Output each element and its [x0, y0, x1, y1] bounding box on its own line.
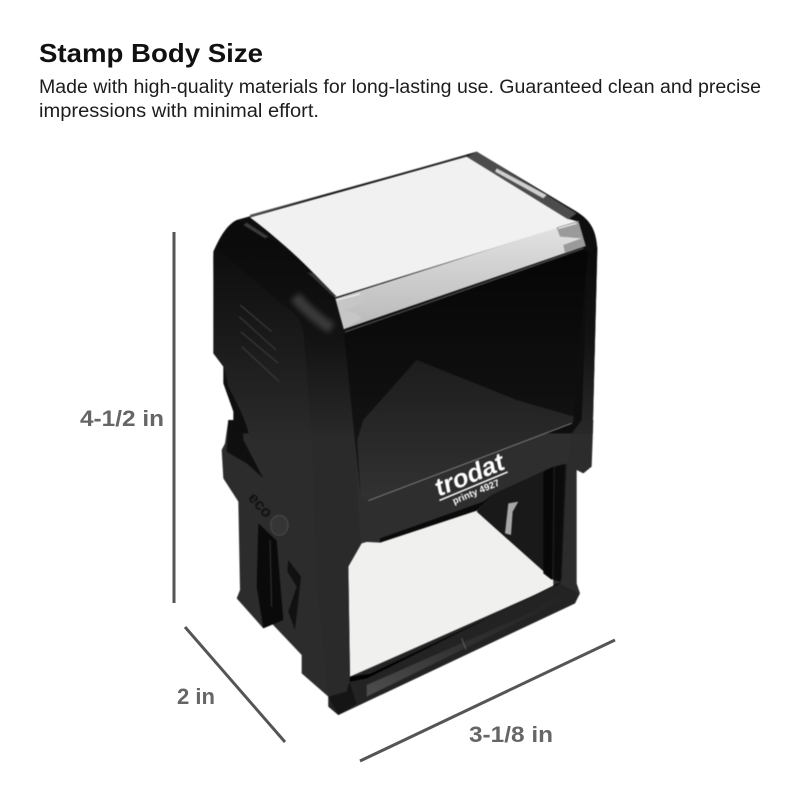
stamp lower body — [222, 420, 593, 715]
top rear trim — [467, 152, 577, 219]
model text: printy 4927 — [451, 478, 501, 507]
right edge — [572, 247, 597, 433]
description text: impressions with minimal effort. — [39, 101, 319, 122]
side panel lower — [257, 420, 312, 513]
eco mark: eco — [244, 490, 276, 522]
window interior mechanism — [477, 463, 567, 580]
dimension line: depth — [185, 627, 285, 742]
mark on base — [462, 638, 466, 649]
dimension label: depth: 2 in — [177, 684, 215, 709]
front lower band — [353, 420, 573, 543]
window lower edge — [350, 583, 562, 682]
stamp upper body — [213, 152, 597, 501]
dimension label: height: 4-1/2 in — [80, 406, 164, 431]
side vents — [239, 305, 279, 382]
left corner column — [312, 420, 360, 697]
side panel — [213, 249, 312, 440]
description text: Made with high-quality materials for long-lasting use. Guaranteed clean and precise — [39, 77, 761, 98]
description text — [39, 77, 761, 122]
side clip — [287, 560, 301, 630]
white top label — [250, 157, 578, 297]
stamp window — [348, 510, 553, 677]
gloss reflection — [357, 360, 574, 500]
recycling mark — [271, 515, 288, 535]
left shoulder — [217, 220, 357, 440]
brand logo: trodat — [430, 447, 510, 502]
panel seam — [368, 423, 572, 501]
base foot — [328, 583, 579, 715]
title: Stamp Body Size — [39, 38, 263, 68]
side slot — [257, 523, 283, 628]
clear bar — [333, 221, 586, 329]
dimension line: height — [172, 232, 176, 603]
dimension line: width — [360, 640, 615, 761]
front glossy panel — [344, 250, 588, 500]
logo underline — [439, 471, 508, 501]
dimension label: width: 3-1/8 in — [469, 722, 553, 747]
stamp product illustration — [213, 152, 597, 715]
